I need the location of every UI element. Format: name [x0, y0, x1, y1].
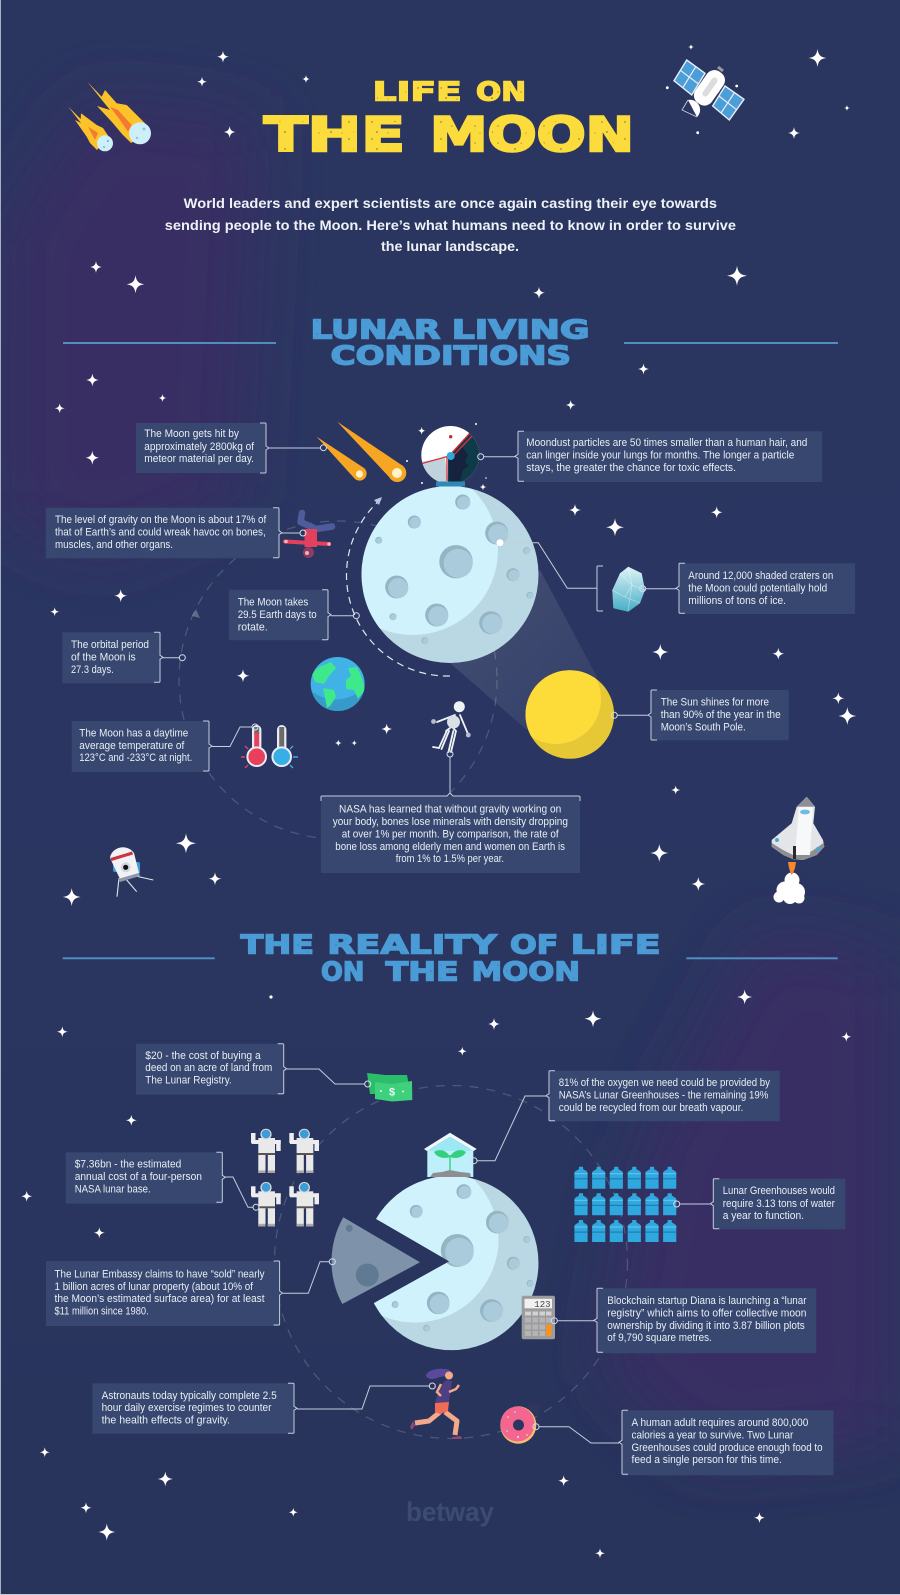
heading: The Reality of Life on the Moon	[63, 931, 838, 987]
callout: bone loss: from 1% to 1.5% per year.	[396, 853, 504, 865]
callout: calories: Greenhouses could produce enough food to	[632, 1442, 823, 1454]
callout: ice: the Moon could potentially hold	[688, 582, 827, 594]
callout: ice: millions of tons of ice.	[688, 595, 786, 607]
callout: lunar registry: Blockchain startup Diana is launching a “lunar	[607, 1295, 807, 1307]
callout: temperature: 123°C and -233°C at night.	[79, 752, 192, 764]
callout: orbital period: 27.3 days.	[71, 664, 114, 676]
heading: Lunar Living Conditions: LIVING	[452, 316, 590, 346]
intro text: sending people to the Moon. Here’s what humans need to know in order to survive	[165, 217, 736, 233]
callout: meteor material	[136, 423, 326, 473]
title	[264, 77, 634, 163]
callout: gravity: muscles, and other organs.	[55, 539, 173, 551]
callout: lunar embassy	[46, 1259, 335, 1326]
callout: bone loss	[321, 751, 580, 873]
callout: exercise	[92, 1383, 435, 1434]
callout: lunar base cost	[66, 1152, 259, 1210]
callout: bone loss: bone loss among elderly men and women on Earth is	[335, 841, 565, 853]
callout: gravity	[46, 508, 306, 558]
icon: moon with cut wedge	[332, 1177, 538, 1350]
callout: lunar base cost: annual cost of a four-person	[75, 1171, 202, 1183]
callout: exercise: the health effects of gravity.	[102, 1414, 230, 1426]
intro text: World leaders and expert scientists are once again casting their eye towards	[184, 195, 717, 211]
callout: land deed: deed on an acre of land from	[145, 1062, 272, 1074]
icon: four astronauts	[251, 1129, 319, 1226]
heading: Lunar Living Conditions: LUNAR	[311, 316, 441, 346]
callout: land deed	[136, 1044, 371, 1095]
callout: lunar registry: registry” which aims to offer collective moon	[607, 1308, 806, 1320]
callout: oxygen: could be recycled from our breath vapour.	[559, 1102, 743, 1114]
heading: Lunar Living Conditions: CONDITIONS	[331, 342, 571, 372]
icon: calculator: 123	[534, 1300, 550, 1310]
intro text	[165, 195, 736, 254]
callout: sun: than 90% of the year in the	[661, 709, 781, 721]
callout: oxygen	[471, 1071, 780, 1164]
icon: satellite	[666, 60, 744, 134]
callout: lunar base cost: NASA lunar base.	[75, 1184, 151, 1196]
callout: moon rotation: 29.5 Earth days to	[238, 609, 317, 621]
heading: The Reality of Life on the Moon: THE	[386, 957, 459, 987]
icon: earth	[310, 657, 365, 711]
title: ON	[476, 77, 526, 107]
callout: sun: Moon’s South Pole.	[661, 722, 746, 734]
callout: oxygen: 81% of the oxygen we need could be provided by	[559, 1077, 770, 1089]
callout: lunar embassy: the Moon’s estimated surface area) for at least	[54, 1293, 265, 1305]
callout: moondust: can linger inside your lungs for months. The longer a particle	[526, 450, 794, 462]
icon: floating astronaut	[284, 513, 332, 558]
sunlight beam	[450, 570, 597, 730]
icon: space shuttle	[772, 797, 824, 904]
callout: exercise: Astronauts today typically complete 2.5	[102, 1390, 277, 1402]
callout: calories: A human adult requires around 800,000	[632, 1417, 808, 1429]
icon: meteors	[317, 422, 406, 482]
callout: orbital period: of the Moon is	[71, 652, 136, 664]
callout: oxygen: NASA’s Lunar Greenhouses - the remaining 19%	[559, 1090, 768, 1102]
heading: The Reality of Life on the Moon: OF	[510, 931, 558, 961]
orbit path, section 2	[274, 1086, 628, 1438]
callout: orbital period: The orbital period	[71, 639, 149, 651]
callout: bone loss: your body, bones lose minerals with density dropping	[333, 816, 568, 828]
callout: lunar registry: ownership by dividing it into 3.87 billion plots	[607, 1320, 805, 1332]
callout: sun	[611, 690, 789, 740]
callout: temperature	[72, 721, 258, 772]
logo: betway: betway	[406, 1497, 494, 1527]
callout: orbital period	[62, 632, 185, 683]
icon: water bottles	[574, 1167, 676, 1242]
callout: meteor material: The Moon gets hit by	[144, 428, 239, 440]
callout: temperature: The Moon has a daytime	[79, 728, 188, 740]
callout: lunar embassy: The Lunar Embassy claims to have “sold” nearly	[54, 1268, 265, 1280]
icon: money: $	[389, 1086, 395, 1098]
callout: moon rotation: rotate.	[238, 622, 268, 634]
icon: calculator	[522, 1296, 555, 1339]
callout: bone loss: NASA has learned that without gravity working on	[339, 804, 561, 816]
callout: ice	[640, 563, 855, 614]
heading: Lunar Living Conditions	[63, 316, 838, 372]
heading: The Reality of Life on the Moon: REALITY	[327, 931, 497, 961]
callout: calories: calories a year to survive. Two Lunar	[632, 1430, 794, 1442]
icon: comets	[68, 82, 151, 151]
callout: calories	[533, 1410, 834, 1475]
icon: thermometers	[241, 725, 298, 768]
callout: moondust: Moondust particles are 50 times smaller than a human hair, and	[526, 437, 807, 449]
callout: lunar embassy: 1 billion acres of lunar property (about 10% of	[54, 1281, 254, 1293]
callout: water	[674, 1179, 845, 1229]
icon: sun	[526, 670, 614, 759]
callout: land deed: The Lunar Registry.	[145, 1074, 232, 1086]
callout: ice: Around 12,000 shaded craters on	[688, 570, 833, 582]
callout: moondust: stays, the greater the chance for toxic effects.	[526, 462, 736, 474]
icon: money	[367, 1073, 412, 1102]
callout: meteor material: approximately 2800kg of	[144, 441, 255, 453]
title: THE	[264, 108, 405, 163]
callout: lunar registry	[551, 1288, 816, 1353]
callout: land deed: $20 - the cost of buying a	[145, 1050, 262, 1062]
heading: The Reality of Life on the Moon: MOON	[472, 957, 580, 987]
icon: moon	[328, 465, 538, 663]
callout: moon rotation: The Moon takes	[238, 596, 309, 608]
icon: ice	[612, 567, 645, 612]
icon: skeleton	[431, 701, 471, 752]
callout: water: Lunar Greenhouses would	[723, 1185, 835, 1197]
heading: The Reality of Life on the Moon: ON	[321, 957, 364, 987]
callout: water: require 3.13 tons of water	[723, 1198, 835, 1210]
heading: The Reality of Life on the Moon: THE	[241, 931, 314, 961]
callout: water: a year to function.	[723, 1210, 804, 1222]
callout: temperature: average temperature of	[79, 740, 185, 752]
callout: moon rotation	[229, 590, 359, 640]
heading: The Reality of Life on the Moon: LIFE	[571, 931, 661, 961]
connector: crater to ice	[496, 539, 603, 611]
icon: runner	[410, 1369, 462, 1439]
callout: lunar embassy: $11 million since 1980.	[54, 1306, 149, 1318]
icon: lander	[110, 847, 153, 897]
callout: sun: The Sun shines for more	[661, 696, 769, 708]
callout: gravity: The level of gravity on the Moon is about 17% of	[55, 514, 267, 526]
callout: moondust	[478, 431, 822, 482]
callout: lunar registry: of 9,790 square metres.	[607, 1332, 712, 1344]
callout: calories: feed a single person for this time.	[632, 1454, 782, 1466]
orbit paths, section 1	[179, 497, 497, 839]
title: MOON	[430, 108, 634, 163]
callout: bone loss: at over 1% per month. By comparison, the rate of	[342, 828, 560, 840]
callout: exercise: hour daily exercise regimes to counter	[102, 1402, 272, 1414]
icon: donut	[500, 1403, 540, 1444]
callout: gravity: that of Earth’s and could wreak havoc on bones,	[55, 526, 266, 538]
callout: lunar base cost: $7.36bn - the estimated	[75, 1158, 181, 1170]
intro text: the lunar landscape.	[381, 238, 519, 254]
icon: helmet with moondust	[406, 423, 487, 486]
title: LIFE	[373, 77, 462, 107]
callout: meteor material: meteor material per day.	[144, 453, 254, 465]
icon: greenhouse	[424, 1133, 477, 1177]
